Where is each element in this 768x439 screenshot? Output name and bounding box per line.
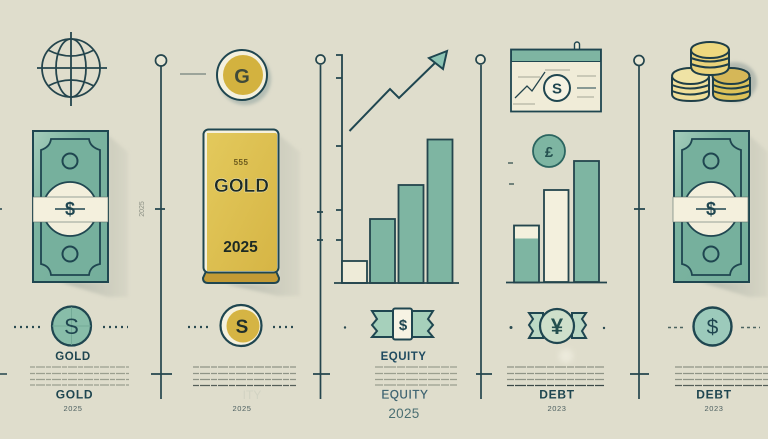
timeline 4	[630, 56, 649, 399]
rotated small year: 2025	[139, 201, 146, 217]
bottom coin: dollar	[694, 308, 732, 346]
icon: banknote with band	[33, 131, 128, 297]
icon: gold bar: GOLD	[214, 176, 269, 197]
icon: coin G	[217, 50, 271, 105]
dotted connectors	[668, 326, 760, 328]
label: gold: GOLD	[56, 388, 93, 402]
label: year: 2025	[388, 406, 420, 421]
icon: chart card: S	[552, 80, 562, 98]
panel: equity chart column	[334, 51, 459, 421]
text block	[675, 367, 768, 386]
label: debt: DEBT	[539, 388, 575, 402]
panel: coins and banknote column	[668, 42, 768, 413]
icon: banknote ribbon: $	[399, 317, 408, 334]
label: year: 2023	[704, 404, 724, 413]
bar chart	[506, 161, 607, 282]
label: year: 2023	[547, 404, 567, 413]
text block	[193, 367, 296, 386]
timeline 2	[313, 55, 330, 399]
label: debt: DEBT	[696, 388, 732, 402]
faded label: ITY	[243, 388, 261, 402]
bottom coin: gold	[220, 305, 262, 346]
panel: globe and banknote column	[14, 32, 129, 413]
icon: coin: £	[545, 144, 554, 161]
bar chart with rising arrow	[334, 51, 459, 283]
icon: gold bar: 2025	[223, 239, 258, 256]
timeline 3	[476, 55, 492, 399]
bottom coin: dollar: $	[707, 316, 719, 339]
label: year: 2025	[63, 404, 83, 413]
icon: coin	[533, 135, 565, 167]
dotted connectors	[14, 326, 128, 328]
label: equity: EQUITY	[381, 390, 429, 402]
label: year: 2025	[232, 404, 252, 413]
icon: gold bar	[203, 130, 300, 296]
faded highlight	[559, 349, 573, 363]
icon: coin stacks	[672, 42, 757, 102]
timeline 1	[151, 55, 172, 399]
dots	[344, 326, 605, 329]
heading: gold: GOLD	[55, 351, 91, 363]
icon: banknote ribbon	[372, 308, 433, 340]
icon: yen ribbon	[529, 309, 586, 343]
left edge ticks	[0, 209, 7, 374]
text block	[375, 367, 457, 385]
bottom coin: gold: S	[236, 317, 248, 338]
icon: chart card	[511, 42, 601, 112]
icon: banknote with band: $	[706, 199, 716, 219]
text block	[30, 367, 129, 385]
bottom coin: teal dollar	[52, 306, 91, 346]
icon: coin G: G	[234, 66, 250, 88]
panel: gold column	[180, 50, 300, 413]
icon: gold bar: 555	[234, 158, 248, 167]
icon: banknote with band: $	[65, 199, 75, 219]
icon: banknote with band	[673, 131, 768, 297]
connector line	[180, 73, 206, 75]
heading: equity: EQUITY	[381, 351, 426, 363]
panel: debt chart column	[344, 42, 607, 413]
bottom coin: teal dollar: S	[64, 314, 79, 339]
icon: globe	[37, 32, 107, 106]
dotted connectors	[188, 326, 296, 328]
icon: yen ribbon: ¥	[551, 314, 564, 339]
text block	[507, 367, 604, 386]
